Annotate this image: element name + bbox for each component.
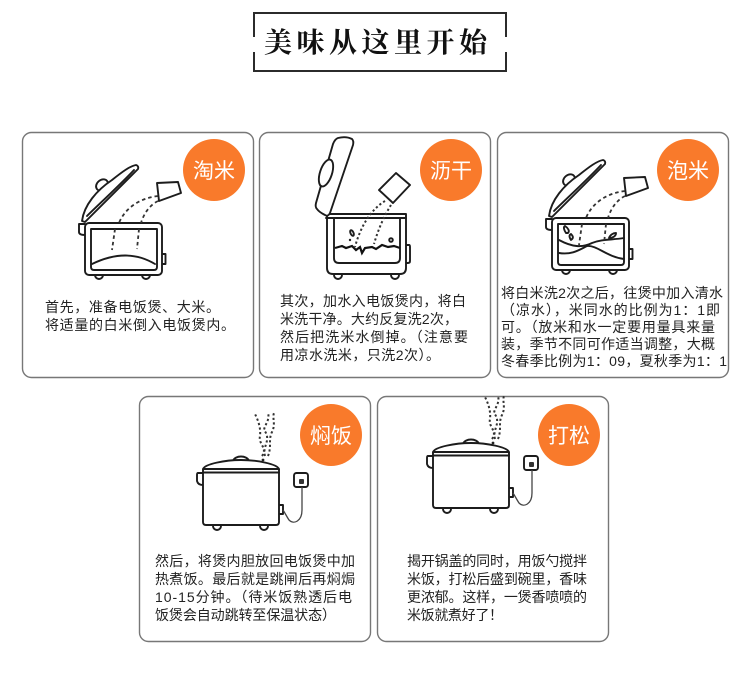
text block: 10-15分钟。（待米饭熟透后电 bbox=[155, 589, 352, 605]
text block bbox=[407, 553, 587, 623]
text block: 用凉水洗米，只洗2次）。 bbox=[280, 347, 440, 363]
text block bbox=[45, 299, 235, 333]
badge: 焖饭 bbox=[300, 404, 362, 466]
text block bbox=[501, 285, 727, 369]
title: 美味从这里开始 bbox=[264, 27, 490, 59]
panel: soak bbox=[498, 132, 728, 378]
icon: open rice cooker being drained bbox=[316, 137, 410, 279]
badge: 打松: 打松 bbox=[548, 425, 590, 448]
text block: 米饭就煮好了！ bbox=[407, 607, 503, 623]
text block: 首先，准备电饭煲、大米。 bbox=[45, 299, 220, 315]
text block bbox=[155, 553, 355, 623]
text block: 装，季节不同可作适当调整，大概 bbox=[501, 336, 715, 352]
badge: 泡米: 泡米 bbox=[667, 160, 709, 183]
panel: fluff bbox=[378, 396, 608, 642]
text block: 饭煲会自动跳转至保温状态） bbox=[155, 607, 336, 623]
panel: rinse rice bbox=[22, 132, 254, 378]
text block: 米洗干净。大约反复洗2次， bbox=[280, 311, 458, 327]
icon: open rice cooker with rice pouring in bbox=[79, 165, 181, 279]
text block: 将适量的白米倒入电饭煲内。 bbox=[45, 317, 235, 333]
badge: 淘米 bbox=[183, 139, 245, 201]
icon: closed rice cooker with steam and plug bbox=[427, 396, 538, 513]
badge: 沥干: 沥干 bbox=[430, 160, 472, 183]
text block: 然后把洗米水倒掉。（注意要 bbox=[280, 329, 468, 345]
icon: open rice cooker with water and splashes bbox=[546, 160, 648, 274]
text block: 冬春季比例为1：09，夏秋季为1：1 bbox=[501, 353, 727, 369]
panel: drain bbox=[260, 132, 490, 378]
panel: simmer bbox=[140, 396, 370, 642]
text block: 揭开锅盖的同时，用饭勺搅拌 bbox=[407, 553, 587, 569]
title bbox=[254, 13, 506, 71]
text block: （凉水），米同水的比例为1：1即 bbox=[501, 302, 720, 318]
icon: closed rice cooker with steam and plug bbox=[197, 413, 308, 530]
text block: 其次，加水入电饭煲内，将白 bbox=[280, 293, 466, 309]
badge: 淘米: 淘米 bbox=[193, 160, 235, 183]
text block: 更浓郁。这样，一煲香喷喷的 bbox=[407, 589, 587, 605]
text block bbox=[280, 293, 468, 363]
text block: 米饭，打松后盛到碗里，香味 bbox=[407, 571, 587, 587]
text block: 热煮饭。最后就是跳闸后再焖焗 bbox=[155, 571, 355, 587]
badge: 打松 bbox=[538, 404, 600, 466]
badge: 泡米 bbox=[657, 139, 719, 201]
text block: 将白米洗2次之后，往煲中加入清水 bbox=[501, 285, 723, 301]
text block: 然后，将煲内胆放回电饭煲中加 bbox=[155, 553, 355, 569]
badge: 沥干 bbox=[420, 139, 482, 201]
text block: 可。（放米和水一定要用量具来量 bbox=[501, 319, 715, 335]
badge: 焖饭: 焖饭 bbox=[310, 425, 352, 448]
